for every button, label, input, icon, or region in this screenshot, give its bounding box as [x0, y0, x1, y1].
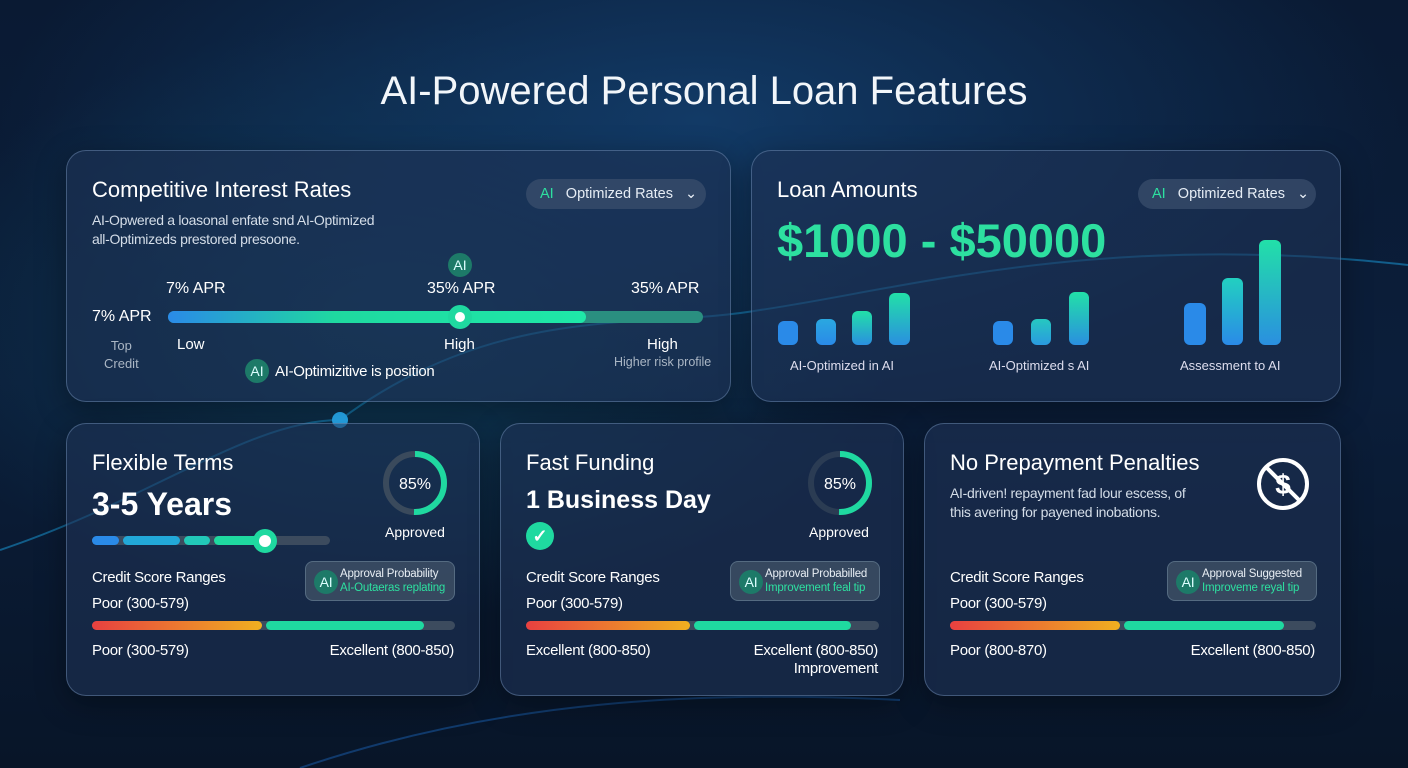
title: AI-Powered Personal Loan Features: [380, 69, 1028, 113]
check icon: ✓: [532, 526, 548, 546]
bar charts: AI-Optimized in AI: [790, 358, 894, 373]
bar charts: Assessment to AI: [1180, 358, 1280, 373]
tooltip: [305, 561, 455, 601]
tooltip: Approval Probabilled: [765, 568, 867, 580]
donut: Approved: [385, 524, 445, 540]
amount: $1000 - $50000: [777, 214, 1106, 267]
credit bar: [526, 621, 879, 630]
panel: competitive interest rates: 35% APR: [631, 280, 699, 297]
panel: competitive interest rates: Credit: [104, 356, 139, 371]
ai note: [245, 359, 434, 383]
panel: fast funding: Poor (300-579): [526, 595, 623, 612]
panel: no prepayment penalties: Poor (300-579): [950, 595, 1047, 612]
tooltip: [1167, 561, 1317, 601]
heading: Flexible Terms: [92, 450, 233, 475]
heading: Loan Amounts: [777, 177, 918, 202]
donut: 85%: [824, 476, 856, 493]
credit bar: [92, 621, 455, 630]
rate slider: [168, 305, 703, 329]
heading: Fast Funding: [526, 450, 654, 475]
description: all-Optimizeds prestored presoone.: [92, 231, 300, 247]
check icon: [526, 522, 554, 550]
dropdown pill: AI Optimized Rates ⌄: [1152, 186, 1309, 202]
panel: no prepayment penalties: Poor (800-870): [950, 642, 1047, 659]
bar charts: AI-Optimized s AI: [989, 358, 1089, 373]
panel: fast funding: Excellent (800-850): [754, 642, 878, 659]
tooltip: Improveme reyal tip: [1202, 582, 1299, 594]
description: this avering for payened inobations.: [950, 504, 1160, 520]
panel: loan amounts: [751, 150, 1341, 402]
tooltip: AI: [745, 574, 757, 590]
tooltip: Approval Probability: [340, 568, 438, 580]
tooltip: AI: [320, 574, 332, 590]
value: 1 Business Day: [526, 486, 711, 514]
heading: No Prepayment Penalties: [950, 450, 1199, 475]
description: [950, 485, 1186, 520]
panel: fast funding: Excellent (800-850): [526, 642, 650, 659]
description: [92, 212, 374, 247]
panel: competitive interest rates: Low: [177, 336, 205, 353]
tooltip: AI-Outaeras replating: [340, 582, 445, 594]
panel: competitive interest rates: High: [444, 336, 475, 353]
panel: competitive interest rates: 7% APR: [92, 308, 152, 325]
panel: flexible terms: [66, 423, 480, 696]
panel: competitive interest rates: Top: [111, 338, 132, 353]
panel: flexible terms: Poor (300-579): [92, 595, 189, 612]
panel: fast funding: Improvement: [794, 660, 878, 677]
bar charts: [778, 240, 1281, 373]
tooltip: Approval Suggested: [1202, 568, 1302, 580]
AI badge: [448, 253, 472, 277]
description: AI-driven! repayment fad lour escess, of: [950, 485, 1185, 501]
tooltip: [730, 561, 880, 601]
AI badge: AI: [453, 257, 467, 273]
labels: 7% APR: [166, 280, 226, 297]
donut: [383, 451, 447, 540]
credit bar: [950, 621, 1316, 630]
ai note: AI: [250, 363, 264, 379]
heading: Competitive Interest Rates: [92, 177, 351, 202]
ai note: AI-Optimizitive is position: [275, 363, 434, 380]
tooltip: AI: [1182, 574, 1194, 590]
donut: 85%: [399, 476, 431, 493]
icon: no dollar: [1257, 458, 1309, 510]
tooltip: Improvement feal tip: [765, 582, 865, 594]
panel: competitive interest rates: [66, 150, 731, 402]
panel: competitive interest rates: 35% APR: [427, 280, 495, 297]
credit score ranges: Credit Score Ranges: [92, 569, 226, 586]
panel: no prepayment penalties: Credit Score Ranges: [950, 569, 1084, 586]
panel: competitive interest rates: High: [647, 336, 678, 353]
value: 3-5 Years: [92, 486, 232, 522]
panel: no prepayment penalties: Excellent (800-850): [1191, 642, 1315, 659]
panel: fast funding: Credit Score Ranges: [526, 569, 660, 586]
icon: no dollar: $: [1275, 469, 1291, 500]
panel: fast funding: [500, 423, 904, 696]
panel: flexible terms: Poor (300-579): [92, 642, 189, 659]
dropdown pill: [1138, 179, 1316, 209]
donut: Approved: [809, 524, 869, 540]
segment slider: [92, 529, 330, 553]
description: AI-Opwered a loasonal enfate snd AI-Optimized: [92, 212, 374, 228]
dropdown pill: AI Optimized Rates ⌄: [540, 186, 697, 202]
panel: no prepayment penalties: [924, 423, 1341, 696]
panel: flexible terms: Excellent (800-850): [330, 642, 454, 659]
panel: competitive interest rates: Higher risk profile: [614, 355, 711, 369]
dropdown pill: [526, 179, 706, 209]
donut: [808, 451, 872, 540]
